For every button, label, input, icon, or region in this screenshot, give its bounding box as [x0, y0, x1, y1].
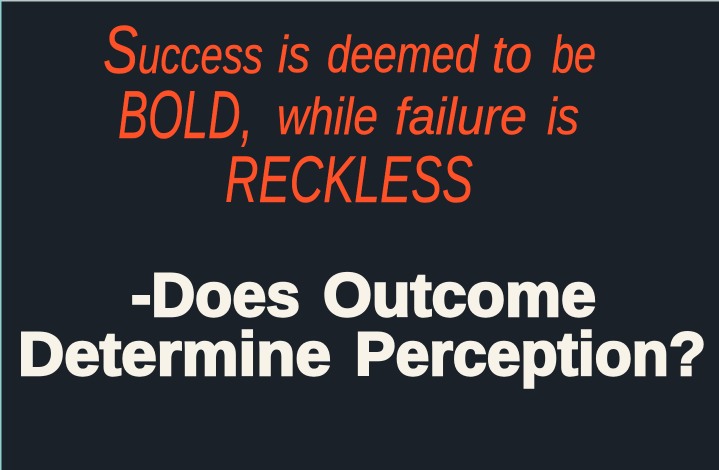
quote heading in orange script: Success — [103, 12, 263, 88]
quote heading in orange script — [103, 12, 596, 216]
quote heading in orange script: be — [552, 26, 596, 84]
quote heading in orange script: while — [277, 88, 378, 146]
quote heading in orange script: BOLD, — [118, 77, 253, 153]
quote heading in orange script: RECKLESS — [225, 142, 473, 216]
question title in cream bold: -Does — [131, 261, 300, 329]
quote heading in orange script: is — [547, 88, 579, 146]
quote heading in orange script: is — [278, 26, 310, 84]
question title in cream bold: Outcome — [323, 261, 596, 329]
question title in cream bold — [18, 261, 706, 388]
quote heading in orange script: failure — [395, 88, 527, 146]
quote heading in orange script: to — [492, 26, 532, 84]
question title in cream bold: Determine — [18, 320, 331, 388]
question title in cream bold: Perception? — [355, 320, 706, 388]
quote heading in orange script: deemed — [327, 26, 480, 84]
